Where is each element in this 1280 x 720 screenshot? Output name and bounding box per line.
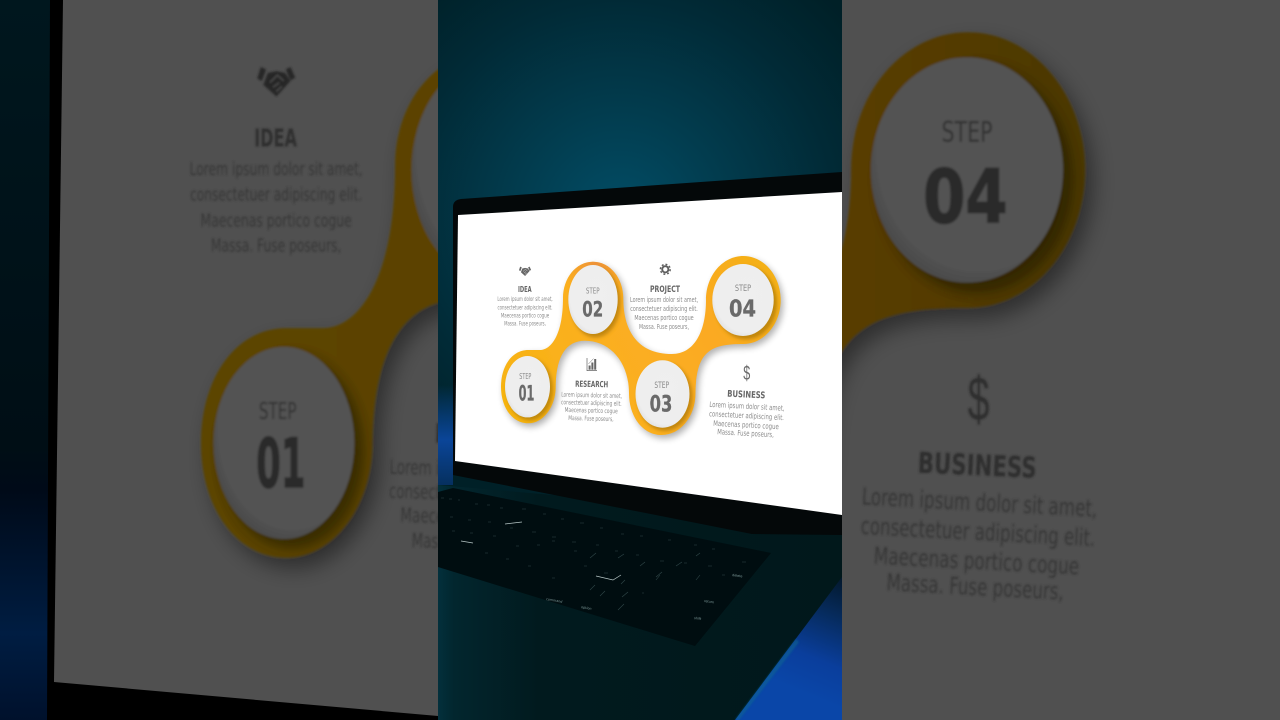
keyboard: shift — [694, 616, 702, 621]
left panel: idea body text: Lorem ipsum dolor sit amet, — [190, 159, 363, 180]
left panel: yellow connector — [200, 68, 438, 559]
left panel: heading IDEA: IDEA — [254, 124, 297, 153]
left panel: idea body text — [190, 159, 363, 257]
keyboard: option — [581, 605, 592, 611]
step 01 disc — [505, 356, 553, 420]
laptop screen — [455, 192, 842, 515]
left panel: research heading and body text: Maecenas portico cogue — [400, 503, 566, 531]
laptop base deck — [438, 485, 842, 720]
laptop screen bezel — [453, 172, 842, 535]
panel: right enlarged blurred view — [842, 0, 1280, 720]
text block: idea: consectetuer adipiscing elit. — [498, 305, 553, 311]
right panel: icon dollar sign: $ — [968, 364, 990, 434]
text block: idea: Lorem ipsum dolor sit amet, — [497, 297, 553, 303]
keyboard: return — [704, 599, 714, 604]
step 03 disc — [636, 360, 692, 431]
step 01 disc: STEP — [519, 372, 532, 381]
panel: left enlarged blurred view — [0, 0, 438, 720]
left panel: connector shadow — [200, 302, 438, 574]
text block: research: Massa. Fuse poseurs, — [568, 414, 614, 423]
connector shadow — [504, 260, 783, 438]
icon: gear — [660, 264, 670, 274]
step 01 disc: 01 — [519, 382, 534, 407]
heading: RESEARCH: RESEARCH — [575, 380, 608, 390]
text block: project: Maecenas portico cogue — [634, 314, 694, 322]
keyboard: delete — [732, 573, 743, 578]
left panel: research heading and body text — [390, 422, 438, 548]
step 02 disc: STEP — [586, 286, 600, 296]
left panel: idea body text: consectetuer adipiscing elit. — [190, 185, 362, 206]
right panel: business body text — [857, 482, 1098, 607]
right panel: business body text: Lorem ipsum dolor sit amet, — [861, 482, 1098, 523]
text block: project — [630, 296, 698, 331]
icon: bar chart — [587, 358, 597, 371]
step 04 disc — [712, 264, 777, 340]
panel: center laptop photo — [438, 0, 842, 720]
keyboard — [438, 488, 771, 646]
text block: business: consectetuer adipiscing elit. — [709, 409, 784, 422]
step 02 disc: 02 — [582, 298, 603, 323]
step 04 disc: STEP — [735, 284, 752, 294]
heading: IDEA: IDEA — [518, 285, 532, 294]
right panel: step 04 disc: 04 — [923, 155, 1008, 240]
right panel: business body text: Massa. Fuse poseurs, — [886, 568, 1064, 606]
right panel: step 04 disc — [871, 57, 1073, 294]
text block: research: consectetuer adipiscing elit. — [561, 398, 622, 408]
heading: PROJECT: PROJECT — [650, 285, 681, 295]
desk surface blue — [735, 577, 842, 720]
text block: business: Maecenas portico cogue — [713, 419, 779, 431]
text block: research: Maecenas portico cogue — [565, 406, 618, 415]
yellow connector band — [501, 256, 781, 435]
right panel: business body text: Maecenas portico cogue — [873, 542, 1080, 580]
step 04 disc: 04 — [729, 295, 756, 323]
right panel: business body text: consectetuer adipiscing elit. — [860, 512, 1096, 552]
left panel: step 01 disc: STEP — [259, 397, 296, 425]
left panel: research heading and body text: Massa. Fuse poseurs, — [411, 528, 554, 556]
icon: handshake — [519, 267, 531, 276]
left panel: enlarged infographic content — [190, 66, 438, 574]
text block: business: Massa. Fuse poseurs, — [717, 427, 774, 439]
left panel: step 01 disc: 01 — [256, 425, 305, 503]
left panel: idea body text: Massa. Fuse poseurs, — [211, 236, 341, 257]
keyboard: command — [546, 597, 563, 604]
right panel: enlarged infographic content — [842, 30, 1100, 602]
right panel: connector shadow — [842, 37, 1100, 398]
text block: research: Lorem ipsum dolor sit amet, — [561, 391, 622, 400]
text block: project: consectetuer adipiscing elit. — [630, 305, 698, 313]
infographic on the laptop screen — [497, 256, 785, 440]
left panel: icon handshake — [257, 67, 295, 96]
text block: project: Lorem ipsum dolor sit amet, — [630, 296, 698, 304]
text block: idea: Massa. Fuse poseurs, — [504, 322, 546, 328]
step 02 disc — [568, 265, 620, 338]
right panel: step 04 disc: STEP — [941, 116, 993, 149]
right panel: yellow connector — [842, 31, 1086, 354]
text block: project: Massa. Fuse poseurs, — [639, 323, 689, 331]
icon: dollar sign: $ — [743, 363, 750, 385]
left panel: step 02 disc — [412, 62, 566, 278]
text block: idea — [497, 297, 553, 328]
text block: research — [561, 391, 622, 423]
step 03 disc: STEP — [654, 381, 669, 391]
left panel: step 01 disc — [214, 347, 364, 549]
step 03 disc: 03 — [650, 392, 672, 418]
left panel: research heading and body text: consectetuer adipiscing elit. — [389, 479, 579, 508]
text block: business: Lorem ipsum dolor sit amet, — [709, 400, 785, 413]
text block: idea: Maecenas portico cogue — [501, 314, 549, 320]
left panel: idea body text: Maecenas portico cogue — [201, 210, 352, 231]
left panel: research heading and body text: Lorem ipsum dolor sit amet, — [389, 455, 580, 484]
left panel: research heading and body text: RESEARCH — [435, 419, 539, 452]
right panel: heading BUSINESS: BUSINESS — [917, 446, 1037, 485]
text block: business — [709, 402, 784, 438]
heading: BUSINESS: BUSINESS — [727, 389, 765, 401]
